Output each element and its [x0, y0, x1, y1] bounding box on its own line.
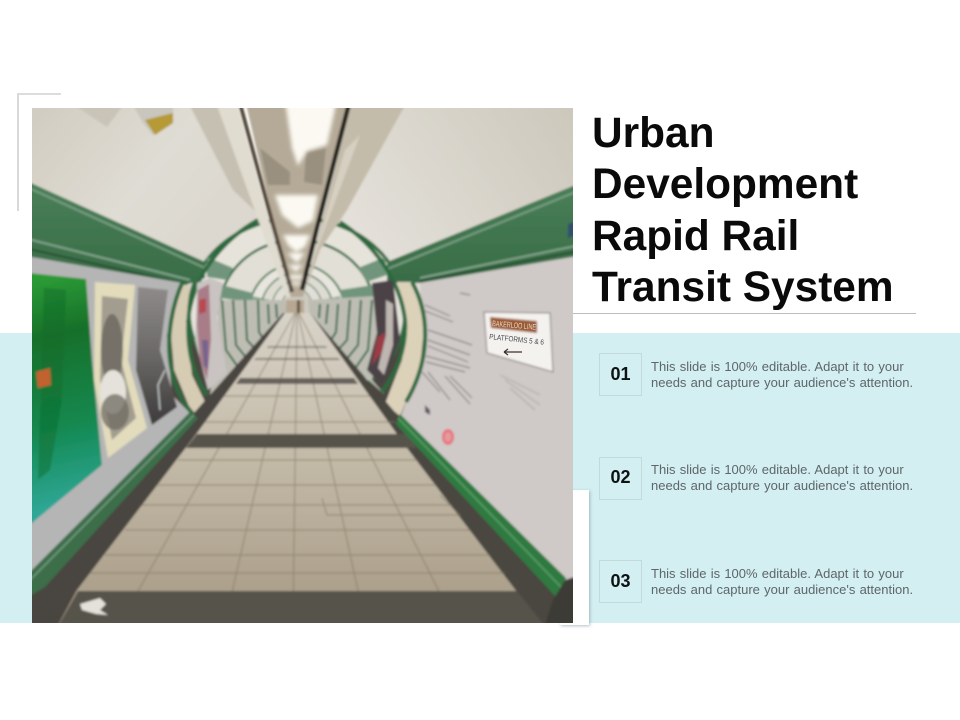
inner wall right: [308, 296, 385, 395]
title: [592, 109, 894, 310]
inner green bands left: [207, 257, 270, 305]
arches right: [340, 222, 425, 402]
text 02: needs and capture your audience's attention.: [651, 478, 913, 493]
title rule: [573, 313, 916, 314]
text 01: needs and capture your audience's attention.: [651, 375, 913, 390]
white beam left: [215, 100, 290, 297]
title: Development: [592, 160, 858, 207]
ceiling left: [20, 95, 300, 320]
left wall: [32, 255, 190, 572]
dark base below walls: [166, 320, 424, 418]
number box 01: [599, 353, 642, 396]
photo: underground rail tunnel: [32, 108, 573, 623]
dark corner right: [546, 576, 573, 623]
number box 03: [599, 560, 642, 603]
number box 02: [599, 457, 642, 500]
number box 02: 02: [610, 467, 631, 487]
item 2: [599, 457, 913, 500]
decorative frame: bottom right: [560, 490, 589, 625]
green skirting strip right: [396, 414, 566, 598]
shaded ceiling patches: [260, 148, 326, 185]
litter on floor: [80, 598, 108, 615]
green frieze left: [20, 178, 205, 286]
back wall end of tunnel: [286, 300, 304, 314]
floor tile lines: [90, 312, 502, 591]
dark floor bands: [50, 346, 556, 640]
text 03: needs and capture your audience's attention.: [651, 582, 913, 597]
shadow on left vault: [190, 108, 254, 210]
number box 01: 01: [610, 364, 631, 384]
sign arrow: [504, 349, 522, 355]
text 03: [651, 566, 913, 597]
beam right: [306, 108, 404, 288]
floor: [58, 312, 517, 623]
green frieze right: [385, 184, 573, 284]
poster: green: [20, 272, 102, 533]
ceiling right: [320, 108, 573, 296]
receding tunnel rings: [186, 218, 404, 383]
inner arches, lower: [222, 300, 372, 370]
title: Transit System: [592, 263, 894, 310]
station sign: [484, 312, 553, 372]
text 03: This slide is 100% editable. Adapt it to your: [651, 566, 904, 581]
inner green bands right: [330, 257, 389, 300]
title: Rapid Rail: [592, 212, 799, 259]
tiled strip left: [170, 284, 208, 416]
fixture on ceiling: [134, 108, 174, 136]
ceiling lights: [275, 100, 337, 285]
ceiling centre: [245, 100, 348, 297]
photo: underground rail tunnel: PLATFORMS 5 & 6: [489, 332, 544, 347]
left skirting: [192, 312, 286, 417]
wall text right: [422, 293, 540, 410]
right wall: [400, 260, 573, 582]
poster strip right: [367, 280, 400, 385]
green skirting strip left: [20, 412, 198, 602]
right skirting: [312, 315, 394, 412]
tiled strip right: [385, 282, 425, 416]
inner wall left: [210, 300, 288, 395]
text 01: This slide is 100% editable. Adapt it to your: [651, 359, 904, 374]
item 3: [599, 560, 913, 603]
poster: cream with sculpture: [94, 282, 147, 458]
number box 03: 03: [610, 571, 631, 591]
item 1: [599, 353, 913, 396]
poster: grey with map line: [136, 287, 177, 425]
text 02: [651, 462, 913, 493]
dark pipe left: [239, 100, 292, 292]
sign text: BAKERLOO LINE: [492, 319, 536, 332]
decorative frame: top left: [17, 93, 61, 211]
roundel on wall: [425, 405, 454, 445]
poster strip left: [195, 278, 227, 390]
text 02: This slide is 100% editable. Adapt it to your: [651, 462, 904, 477]
text 01: [651, 359, 913, 390]
title: Urban: [592, 109, 714, 156]
shadow near fixture: [80, 108, 121, 126]
background band: [0, 333, 960, 623]
arches left: [169, 220, 258, 414]
dark pipe right: [302, 100, 350, 290]
